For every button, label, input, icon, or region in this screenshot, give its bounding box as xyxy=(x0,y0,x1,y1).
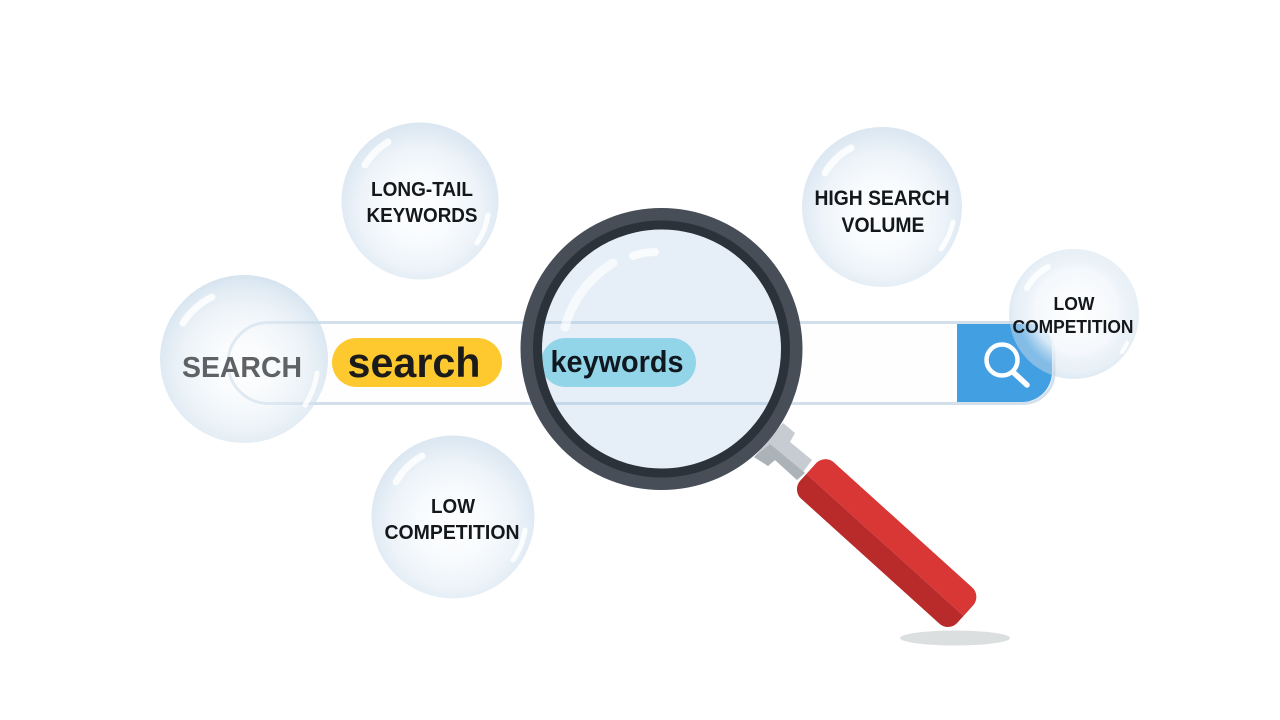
lens frame xyxy=(527,214,796,484)
bubble: low competition right: COMPETITION xyxy=(1012,317,1134,337)
bubble: high search volume xyxy=(802,127,962,287)
keywords highlight: keywords xyxy=(550,344,684,379)
magnifying glass xyxy=(527,214,982,632)
bubble: low competition right: LOW xyxy=(1054,294,1094,314)
red handle xyxy=(796,459,976,627)
shadow under magnifier xyxy=(900,630,1010,646)
bubble: long-tail keywords: KEYWORDS xyxy=(366,205,478,227)
bubble: low competition bottom: LOW xyxy=(431,496,475,518)
search bar xyxy=(228,322,1054,404)
handle connector xyxy=(754,423,812,480)
bubble: high search volume: HIGH SEARCH xyxy=(814,187,950,210)
bubble: search xyxy=(160,275,328,443)
lens shine xyxy=(565,263,613,327)
bubble: low competition right xyxy=(1009,249,1139,379)
bubble: low competition bottom xyxy=(372,436,534,598)
bubble: long-tail keywords: LONG-TAIL xyxy=(371,179,473,201)
search button xyxy=(957,324,1052,402)
bubble: low competition bottom: COMPETITION xyxy=(384,522,520,544)
bar lines seen through lens xyxy=(535,322,790,404)
highlight: search: search xyxy=(348,339,480,386)
bubble: search: SEARCH xyxy=(182,352,302,384)
keywords highlight xyxy=(541,338,696,387)
bubble: long-tail keywords xyxy=(342,122,498,280)
lens xyxy=(540,227,784,471)
bubble: high search volume: VOLUME xyxy=(842,214,924,237)
